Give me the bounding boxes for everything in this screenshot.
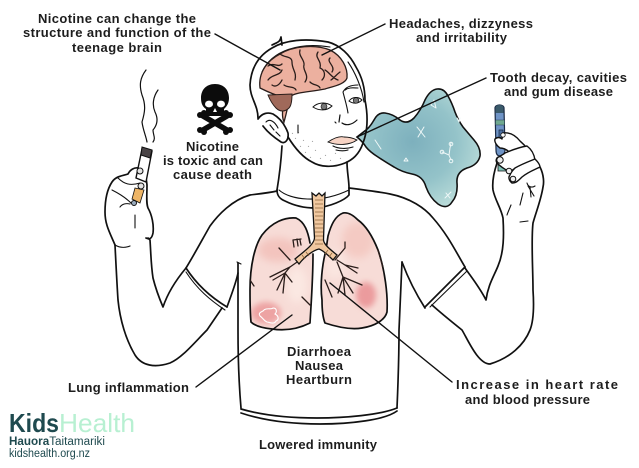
text: stomach symptoms: Nausea (295, 358, 344, 373)
text: heart rate: Increase in heart rate (456, 377, 618, 392)
text: nicotine and the brain: structure and function of the (23, 25, 211, 40)
brain (260, 47, 347, 122)
logo: KidsHealth: Health (59, 408, 135, 438)
vape: left (136, 149, 152, 182)
text: headaches: Headaches, dizzyness (389, 16, 533, 31)
fingers (495, 133, 527, 155)
logo: KidsHealth: Kids (9, 408, 59, 438)
logo: KidsHealth (9, 408, 135, 460)
text: stomach symptoms: Heartburn (286, 372, 352, 387)
right arm and hand (432, 105, 544, 364)
smoke wisps (140, 70, 158, 142)
text: tooth decay: Tooth decay, cavities (490, 70, 627, 85)
text: stomach symptoms: Diarrhoea (287, 344, 352, 359)
face features (297, 125, 299, 133)
left lung (249, 217, 314, 331)
trachea and bronchi (295, 193, 337, 264)
ear (258, 113, 288, 143)
text: nicotine is toxic: is toxic and can (163, 153, 263, 168)
callout lines (196, 24, 486, 387)
vape: right (495, 105, 505, 156)
vapour cloud (357, 89, 480, 207)
left arm and hand (105, 147, 222, 366)
text: headaches: and irritability (416, 30, 508, 45)
text: nicotine is toxic: cause death (173, 167, 252, 182)
text: lowered immunity: Lowered immunity (259, 437, 378, 452)
shirt body (186, 188, 467, 424)
text: nicotine and the brain: teenage brain (72, 40, 162, 55)
head (250, 37, 367, 208)
text: lung inflammation: Lung inflammation (68, 380, 189, 395)
logo: KidsHealth: HauoraTaitamariki (9, 436, 105, 448)
stubble (292, 132, 341, 161)
text: heart rate: and blood pressure (465, 392, 590, 407)
text: nicotine and the brain: Nicotine can change the (38, 11, 196, 26)
logo: KidsHealth: kidshealth.org.nz (9, 448, 90, 460)
text: nicotine is toxic: Nicotine (186, 139, 239, 154)
text: tooth decay: and gum disease (504, 84, 613, 99)
illustration: person (105, 37, 544, 424)
right lung (318, 210, 390, 332)
icon: skull and crossbones (197, 84, 233, 135)
